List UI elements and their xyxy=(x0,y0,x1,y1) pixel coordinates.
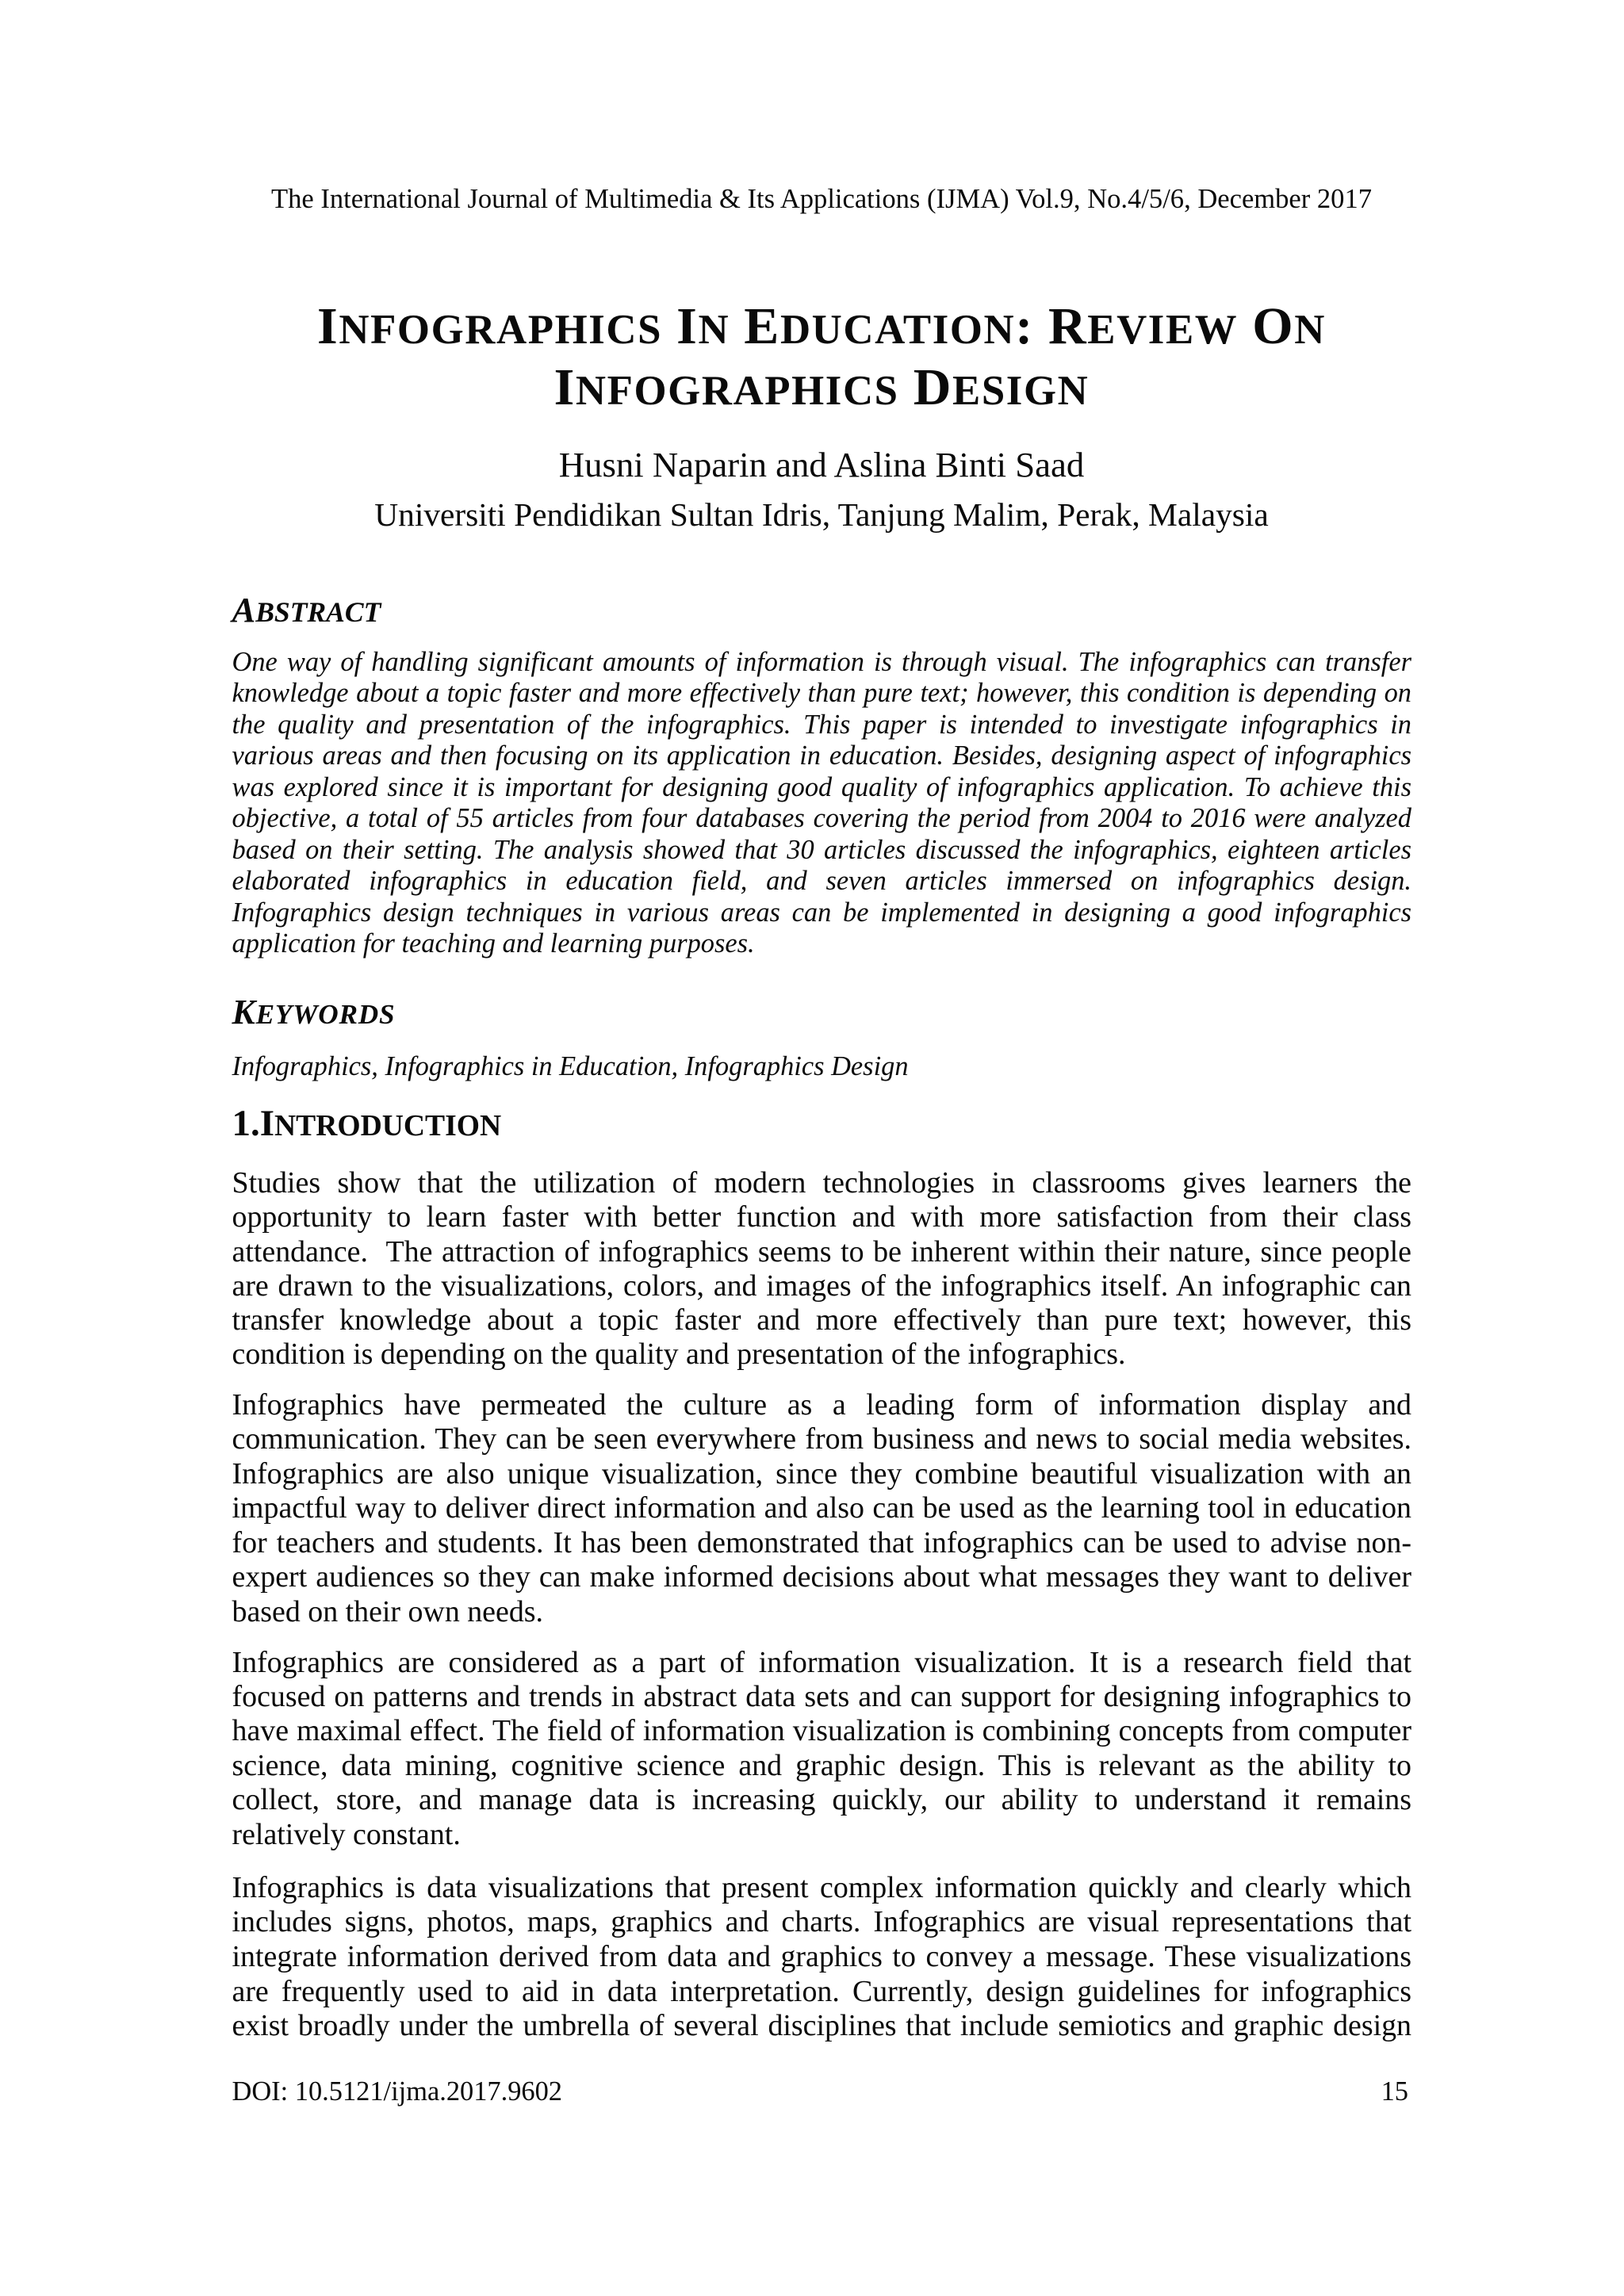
paragraph 3: relatively constant. xyxy=(232,1818,461,1851)
abstract text: objective, a total of 55 articles from four databases covering the period from 2004 to 2016 were analyzed xyxy=(232,803,1411,833)
title: INFOGRAPHICS DESIGN xyxy=(554,358,1089,416)
paragraph 4 xyxy=(232,1871,1411,2042)
keywords list: Infographics, Infographics in Education, Infographics Design xyxy=(232,1051,909,1081)
abstract text: knowledge about a topic faster and more effectively than pure text; however, this condition is depending on xyxy=(232,678,1411,708)
abstract text: the quality and presentation of the infographics. This paper is intended to investigate infographics in xyxy=(232,709,1411,739)
paragraph 2: communication. They can be seen everywhere from business and news to social media websites. xyxy=(232,1422,1411,1456)
heading: abstract: ABSTRACT xyxy=(232,590,381,629)
paragraph 2: Infographics are also unique visualization, since they combine beautiful visualization with an xyxy=(232,1457,1411,1490)
paragraph 2 xyxy=(232,1387,1411,1628)
abstract text: various areas and then focusing on its application in education. Besides, designing aspect of infographics xyxy=(232,740,1411,771)
paragraph 1: attendance. The attraction of infographics seems to be inherent within their nature, since people xyxy=(232,1235,1411,1269)
paragraph 2: for teachers and students. It has been demonstrated that infographics can be used to advise non- xyxy=(232,1526,1411,1559)
footer: DOI: DOI: 10.5121/ijma.2017.9602 xyxy=(232,2076,562,2107)
paragraph 1: transfer knowledge about a topic faster and more effectively than pure text; however, this xyxy=(232,1303,1411,1337)
paragraph 1 xyxy=(232,1166,1411,1371)
abstract text: application for teaching and learning purposes. xyxy=(232,928,755,959)
title xyxy=(317,297,1326,416)
paragraph 4: Infographics is data visualizations that present complex information quickly and clearly which xyxy=(232,1871,1411,1904)
paragraph 4: includes signs, photos, maps, graphics and charts. Infographics are visual representations that xyxy=(232,1905,1411,1938)
heading: introduction: 1.INTRODUCTION xyxy=(232,1103,501,1144)
paragraph 4: are frequently used to aid in data interpretation. Currently, design guidelines for infographics xyxy=(232,1975,1411,2008)
affiliation: Universiti Pendidikan Sultan Idris, Tanjung Malim, Perak, Malaysia xyxy=(374,496,1269,533)
paragraph 1: Studies show that the utilization of modern technologies in classrooms gives learners the xyxy=(232,1166,1411,1200)
journal header: The International Journal of Multimedia & Its Applications (IJMA) Vol.9, No.4/5/6, December 2017 xyxy=(271,184,1372,214)
paragraph 2: Infographics have permeated the culture as a leading form of information display and xyxy=(232,1387,1411,1421)
paragraph 2: expert audiences so they can make informed decisions about what messages they want to deliver xyxy=(232,1560,1411,1594)
heading: keywords: KEYWORDS xyxy=(232,993,395,1031)
abstract text: One way of handling significant amounts of information is through visual. The infographics can transfer xyxy=(232,647,1411,677)
abstract text: elaborated infographics in education field, and seven articles immersed on infographics design. xyxy=(232,866,1411,896)
paragraph 3: Infographics are considered as a part of information visualization. It is a research field that xyxy=(232,1646,1411,1679)
title: INFOGRAPHICS IN EDUCATION: REVIEW ON xyxy=(317,297,1326,355)
paragraph 3: have maximal effect. The field of information visualization is combining concepts from computer xyxy=(232,1714,1411,1747)
abstract text: Infographics design techniques in various areas can be implemented in designing a good infographics xyxy=(232,897,1411,928)
paragraph 3: focused on patterns and trends in abstract data sets and can support for designing infographics to xyxy=(232,1680,1411,1713)
abstract text: was explored since it is important for designing good quality of infographics application. To achieve this xyxy=(232,772,1411,802)
paragraph 1: are drawn to the visualizations, colors, and images of the infographics itself. An infographic can xyxy=(232,1269,1411,1303)
paragraph 1: opportunity to learn faster with better function and with more satisfaction from their class xyxy=(232,1200,1411,1234)
paragraph 3: collect, store, and manage data is increasing quickly, our ability to understand it remains xyxy=(232,1783,1411,1816)
abstract text xyxy=(232,647,1411,959)
paragraph 4: integrate information derived from data and graphics to convey a message. These visualizations xyxy=(232,1940,1411,1973)
footer: page number: 15 xyxy=(1381,2076,1408,2107)
paragraph 3 xyxy=(232,1646,1411,1851)
paragraph 4: exist broadly under the umbrella of several disciplines that include semiotics and graphic design xyxy=(232,2009,1411,2042)
authors: Husni Naparin and Aslina Binti Saad xyxy=(559,445,1084,484)
abstract text: based on their setting. The analysis showed that 30 articles discussed the infographics, eighteen articles xyxy=(232,834,1411,864)
paragraph 3: science, data mining, cognitive science and graphic design. This is relevant as the ability to xyxy=(232,1749,1411,1782)
paragraph 2: based on their own needs. xyxy=(232,1595,543,1628)
paragraph 2: impactful way to deliver direct information and also can be used as the learning tool in education xyxy=(232,1491,1411,1525)
paragraph 1: condition is depending on the quality and presentation of the infographics. xyxy=(232,1337,1126,1371)
